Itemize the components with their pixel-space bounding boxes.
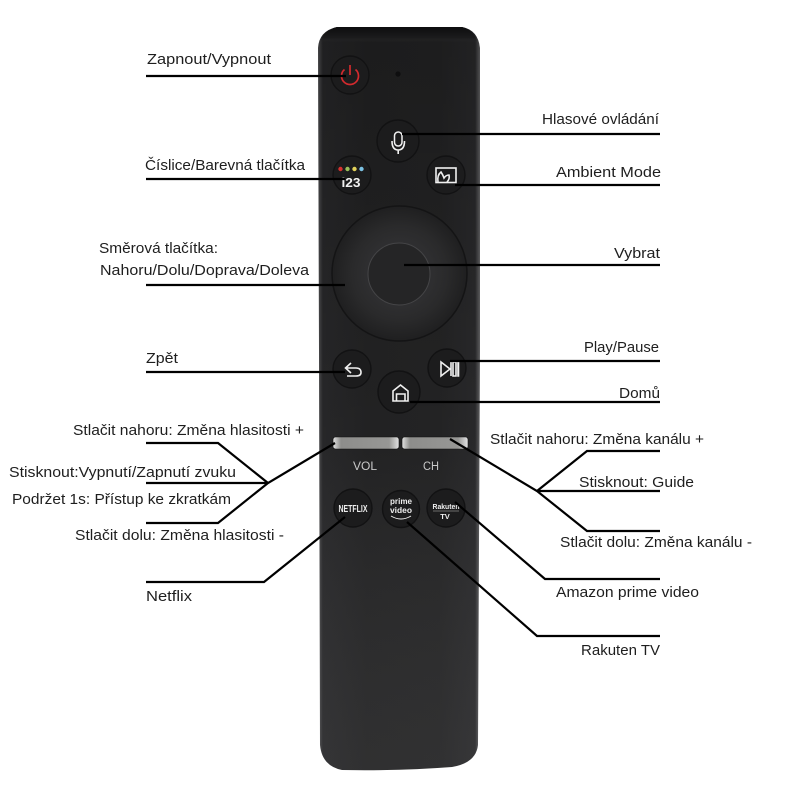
numbers and colour keys button: i23 [342, 175, 360, 190]
callout group: channel rocker: Stlačit dolu: Změna kanálu - [560, 534, 752, 551]
callout: Netflix [146, 517, 345, 605]
CH label: CH [423, 461, 439, 473]
callout: Rakuten TV [407, 522, 660, 659]
prime video button [382, 490, 420, 528]
Netflix button: NETFLIX [338, 504, 368, 515]
callout: voice control: Hlasové ovládání [542, 111, 660, 128]
callout: play pause: Play/Pause [584, 339, 659, 356]
callout group: volume rocker: Podržet 1s: Přístup ke zkratkám [12, 491, 231, 508]
indicator LED [395, 71, 401, 77]
callout: digits and colour keys: Číslice/Barevná tlačítka [145, 157, 306, 174]
callout group: channel rocker [450, 431, 752, 551]
callout: direction keys: Směrová tlačítka: [99, 240, 218, 257]
callout group: volume rocker [9, 422, 335, 544]
Netflix button [334, 489, 372, 527]
direction pad [332, 206, 467, 341]
VOL label: VOL [353, 461, 378, 473]
callout: ambient mode: Ambient Mode [556, 164, 661, 181]
top edge shading [320, 27, 477, 42]
callout group: volume rocker: Stisknout:Vypnutí/Zapnutí zvuku [9, 464, 236, 481]
back button [333, 350, 371, 388]
callout: Rakuten TV: Rakuten TV [581, 642, 660, 659]
callout group: volume rocker: Stlačit dolu: Změna hlasitosti - [75, 527, 284, 544]
callout: power: Zapnout/Vypnout [147, 51, 272, 68]
callout: back: Zpět [146, 350, 179, 367]
callout: direction keys: Nahoru/Dolu/Doprava/Doleva [100, 262, 310, 279]
callout: Netflix: Netflix [146, 588, 193, 605]
callout group: volume rocker: Stlačit nahoru: Změna hlasitosti + [73, 422, 304, 439]
callout: Amazon prime video: Amazon prime video [556, 584, 699, 601]
prime video button: video [390, 506, 412, 515]
channel rocker [402, 437, 468, 449]
Rakuten TV button: TV [440, 512, 450, 521]
callout: direction keys [99, 240, 345, 285]
microphone button [377, 120, 419, 162]
remote body [318, 27, 480, 770]
play pause button [428, 349, 466, 387]
home button [378, 371, 420, 413]
Rakuten TV button [427, 489, 465, 527]
power button [331, 56, 369, 94]
callout: home: Domů [619, 385, 660, 402]
numbers and colour keys button [333, 156, 371, 194]
callout group: channel rocker: Stlačit nahoru: Změna kanálu + [490, 431, 704, 448]
remote control [318, 27, 480, 770]
callout group: channel rocker: Stisknout: Guide [579, 474, 694, 491]
prime video button: prime [390, 497, 413, 506]
Rakuten TV button: Rakuten [432, 502, 460, 511]
callout: Amazon prime video [455, 502, 699, 601]
volume rocker [333, 437, 399, 449]
callout: select: Vybrat [614, 245, 661, 262]
ambient mode button [427, 156, 465, 194]
